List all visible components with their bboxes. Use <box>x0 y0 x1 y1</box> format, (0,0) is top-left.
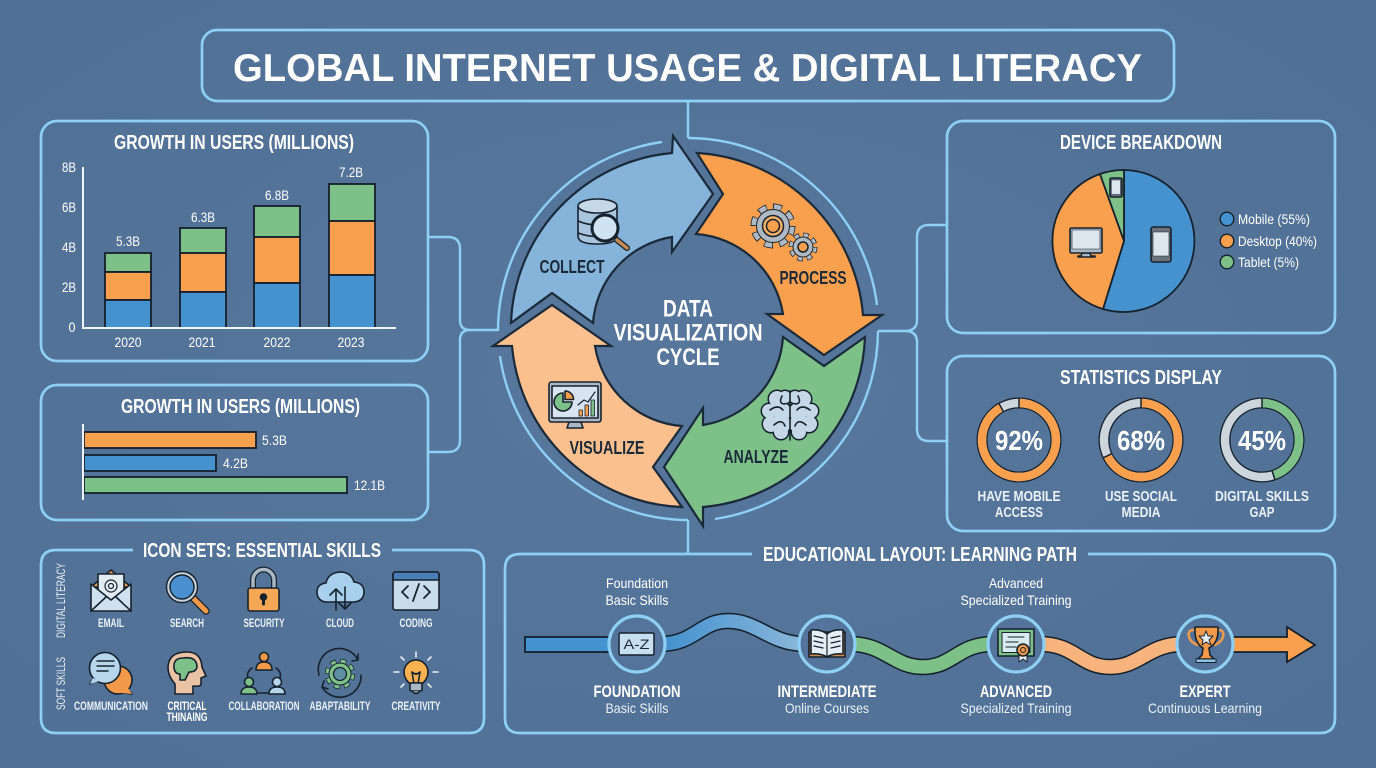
icon: light bulb <box>394 652 438 694</box>
stage label: foundation: FOUNDATION <box>594 682 680 701</box>
x axis labels: 2021 <box>188 334 216 350</box>
legend: Mobile (55%) <box>1238 211 1310 227</box>
icon: tablet <box>1110 178 1122 197</box>
y axis labels: 0 <box>68 319 76 335</box>
side label: soft skills: SOFT SKILLS <box>56 657 68 710</box>
center label <box>614 296 762 371</box>
label: coding: CODING <box>400 618 433 630</box>
label: adaptability: ABAPTABILITY <box>310 701 371 713</box>
stat: 68 percent <box>1103 398 1178 521</box>
arrow: collect <box>511 136 713 323</box>
center label: DATA <box>663 296 713 322</box>
stage label: intermediate: INTERMEDIATE <box>778 682 876 701</box>
bar 2020 <box>105 253 151 328</box>
axes <box>83 167 396 328</box>
pie chart <box>1052 170 1194 312</box>
x axis labels <box>114 334 365 350</box>
stat: 45 percent: GAP <box>1250 505 1275 521</box>
stat: 68 percent: USE SOCIAL <box>1105 489 1177 505</box>
path: green wave <box>850 644 993 667</box>
y axis labels: 8B <box>62 159 76 175</box>
label: email: EMAIL <box>98 618 124 630</box>
y axis labels: 4B <box>62 239 76 255</box>
callouts above path: Basic Skills <box>606 592 668 608</box>
path: peach wave <box>1040 644 1183 667</box>
stage label: advanced <box>960 682 1072 716</box>
stat: 92 percent: HAVE MOBILE <box>978 489 1061 505</box>
heading: statistics display: STATISTICS DISPLAY <box>1060 367 1223 389</box>
stage label: intermediate <box>778 682 876 716</box>
vertical axis <box>82 424 84 500</box>
icon: phone <box>1151 227 1171 262</box>
outer ring <box>498 138 878 520</box>
label: search: SEARCH <box>170 618 204 630</box>
panel: statistics display <box>947 356 1335 531</box>
panel: stacked bar chart <box>41 121 428 361</box>
horizontal bar value labels <box>223 432 385 493</box>
bar value labels: 6.3B <box>191 209 215 225</box>
heading: icon sets: ICON SETS: ESSENTIAL SKILLS <box>143 540 381 562</box>
bar value labels: 6.8B <box>265 187 289 203</box>
panel: horizontal bar chart <box>41 385 428 520</box>
stage label: expert <box>1148 682 1262 716</box>
icon: brain <box>762 391 818 440</box>
path: start bar <box>525 637 615 652</box>
icon: email <box>91 570 131 611</box>
bar 2022 <box>254 206 300 328</box>
heading: growth in users: GROWTH IN USERS (MILLIONS) <box>114 132 354 154</box>
icon: desktop <box>1070 228 1102 257</box>
path: blue wave <box>660 621 805 644</box>
label: critical thinking: CRITICAL <box>168 701 206 713</box>
label: collect: COLLECT <box>540 256 605 277</box>
title <box>202 30 1174 101</box>
label: analyze: ANALYZE <box>724 446 788 467</box>
icon: security lock <box>248 570 279 611</box>
x axis labels: 2023 <box>338 334 365 350</box>
icon: search <box>166 572 206 611</box>
icon: adaptability <box>318 648 361 697</box>
center label: VISUALIZATION <box>614 320 762 346</box>
icon: dashboard monitor <box>549 382 601 428</box>
legend: Desktop (40%) <box>1238 233 1317 249</box>
arrow: path end <box>1230 627 1315 662</box>
stage label: intermediate: Online Courses <box>785 700 869 716</box>
icon: collaboration <box>241 652 285 694</box>
label: visualize: VISUALIZE <box>570 437 644 458</box>
horizontal bars <box>84 432 347 493</box>
label: critical thinking: THINAING <box>166 712 208 724</box>
label: creativity: CREATIVITY <box>392 701 441 713</box>
stat: 92 percent: 92% <box>995 425 1043 456</box>
stat: 92 percent <box>978 398 1061 521</box>
arrow: analyze <box>664 337 865 526</box>
connector lines <box>428 101 947 554</box>
bar value labels: 5.3B <box>116 233 140 249</box>
panel: learning path <box>505 544 1335 733</box>
stat: 45 percent: 45% <box>1238 425 1286 456</box>
bar 2023 <box>329 184 375 328</box>
heading: learning path: EDUCATIONAL LAYOUT: LEARNING PATH <box>763 544 1077 566</box>
label: cloud: CLOUD <box>326 618 354 630</box>
callouts above path <box>606 575 1072 608</box>
label: process: PROCESS <box>780 267 846 288</box>
callouts above path: Specialized Training <box>960 592 1072 608</box>
arrow: visualize <box>493 305 682 507</box>
node: intermediate <box>799 616 855 672</box>
y axis labels: 2B <box>62 279 76 295</box>
y axis labels <box>62 159 76 335</box>
stat: 45 percent: DIGITAL SKILLS <box>1215 489 1309 505</box>
horizontal bar value labels: 12.1B <box>354 477 385 493</box>
x axis labels: 2022 <box>264 334 291 350</box>
horizontal bar value labels: 5.3B <box>262 432 287 448</box>
legend <box>1220 211 1317 270</box>
panel: device breakdown <box>947 121 1335 333</box>
heading: device breakdown: DEVICE BREAKDOWN <box>1060 132 1222 154</box>
stage label: foundation: Basic Skills <box>606 700 668 716</box>
center label: CYCLE <box>656 344 720 371</box>
horizontal bar value labels: 4.2B <box>223 455 248 471</box>
callouts above path: Foundation <box>606 575 668 591</box>
x axis labels: 2020 <box>114 334 142 350</box>
node: foundation <box>609 616 665 672</box>
label: critical thinking <box>166 701 208 724</box>
node: foundation: A-Z <box>624 636 650 652</box>
title: GLOBAL INTERNET USAGE & DIGITAL LITERACY <box>233 47 1142 90</box>
stage label: advanced: Specialized Training <box>960 700 1072 716</box>
label: collaboration: COLLABORATION <box>228 701 300 713</box>
stage label: expert: EXPERT <box>1180 682 1231 701</box>
icon: coding window <box>393 572 439 610</box>
stat: 92 percent: ACCESS <box>995 505 1043 521</box>
icon: head with brain <box>168 652 206 694</box>
icon: database search <box>578 199 627 248</box>
label: communication: COMMUNICATION <box>74 701 148 713</box>
icon: gears <box>754 208 814 258</box>
heading: growth in users: GROWTH IN USERS (MILLIONS) <box>121 396 360 418</box>
stage label: foundation <box>594 682 680 716</box>
node: advanced <box>988 616 1044 672</box>
icon: communication <box>90 652 132 694</box>
stat: 68 percent: 68% <box>1117 425 1165 456</box>
stage label: expert: Continuous Learning <box>1148 700 1262 716</box>
callouts above path: Advanced <box>989 575 1043 591</box>
icon: cloud <box>317 572 364 610</box>
arrow: process <box>696 153 882 355</box>
side label: digital literacy: DIGITAL LITERACY <box>56 563 68 638</box>
bar value labels <box>116 164 363 249</box>
bar 2021 <box>180 228 226 328</box>
stage label: advanced: ADVANCED <box>980 682 1052 701</box>
bar value labels: 7.2B <box>339 164 363 180</box>
legend: Tablet (5%) <box>1238 254 1299 270</box>
data visualization cycle <box>493 136 882 526</box>
stat: 68 percent: MEDIA <box>1122 505 1161 521</box>
stat: 45 percent <box>1215 398 1309 521</box>
y axis labels: 6B <box>62 199 76 215</box>
panel: icon sets <box>41 540 484 733</box>
label: security: SECURITY <box>244 618 285 630</box>
node: expert <box>1177 616 1233 672</box>
